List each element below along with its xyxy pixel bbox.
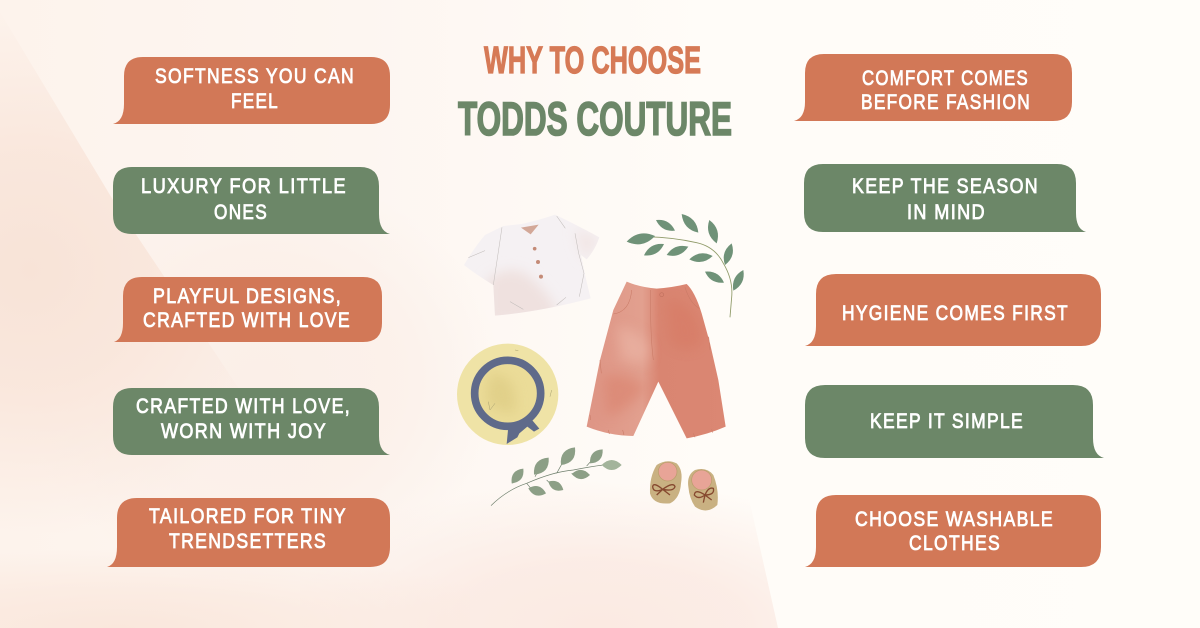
icon: baby shoes	[650, 461, 718, 510]
title	[458, 40, 732, 145]
callout: hygiene comes first	[805, 274, 1101, 346]
callout: crafted with love: CRAFTED WITH LOVE,	[136, 395, 351, 418]
callout: luxury for little ones: ONES	[214, 201, 268, 224]
icon: coral trousers	[587, 282, 726, 438]
callout: tailored for tiny trendsetters: TAILORED FOR TINY	[149, 505, 347, 528]
callout: playful designs: CRAFTED WITH LOVE	[143, 309, 351, 332]
callout: comfort comes before fashion: BEFORE FASHION	[861, 91, 1031, 114]
callout: hygiene comes first: HYGIENE COMES FIRST	[842, 302, 1069, 325]
callout: playful designs	[114, 277, 382, 342]
callout: luxury for little ones	[113, 167, 390, 234]
background: soft peach wash	[0, 0, 778, 628]
callout: crafted with love: WORN WITH JOY	[161, 420, 327, 443]
callout: softness you can feel: SOFTNESS YOU CAN	[155, 65, 355, 88]
icon: white shirt	[464, 215, 600, 323]
callout: comfort comes before fashion: COMFORT COMES	[862, 67, 1029, 90]
illustration: baby clothes flat lay	[457, 211, 747, 510]
callout: keep the season in mind	[804, 164, 1086, 232]
callout: tailored for tiny trendsetters: TRENDSETTERS	[169, 530, 327, 553]
callout: choose washable clothes: CLOTHES	[909, 532, 1001, 555]
callout: luxury for little ones: LUXURY FOR LITTLE	[141, 175, 347, 198]
callout: playful designs: PLAYFUL DESIGNS,	[153, 285, 342, 308]
callout: softness you can feel	[113, 57, 390, 124]
heading: why to choose: WHY TO CHOOSE	[484, 40, 701, 82]
left shoe	[650, 461, 682, 504]
callout: keep the season in mind: KEEP THE SEASON	[852, 175, 1039, 198]
callout: keep the season in mind: IN MIND	[907, 201, 986, 224]
callout: choose washable clothes	[805, 495, 1101, 567]
icon: olive branch	[491, 444, 622, 506]
callout: softness you can feel: FEEL	[231, 90, 279, 113]
right shoe	[688, 469, 718, 510]
callout: choose washable clothes: CHOOSE WASHABLE	[855, 508, 1054, 531]
callout: crafted with love	[113, 388, 390, 455]
icon: straw hat	[457, 344, 558, 445]
callout: comfort comes before fashion	[794, 54, 1072, 121]
icon: green branch	[626, 211, 747, 317]
callout: keep it simple: KEEP IT SIMPLE	[870, 410, 1024, 433]
callout: keep it simple	[805, 385, 1104, 458]
callout: tailored for tiny trendsetters	[107, 498, 390, 567]
heading: todds couture: TODDS COUTURE	[458, 92, 732, 145]
